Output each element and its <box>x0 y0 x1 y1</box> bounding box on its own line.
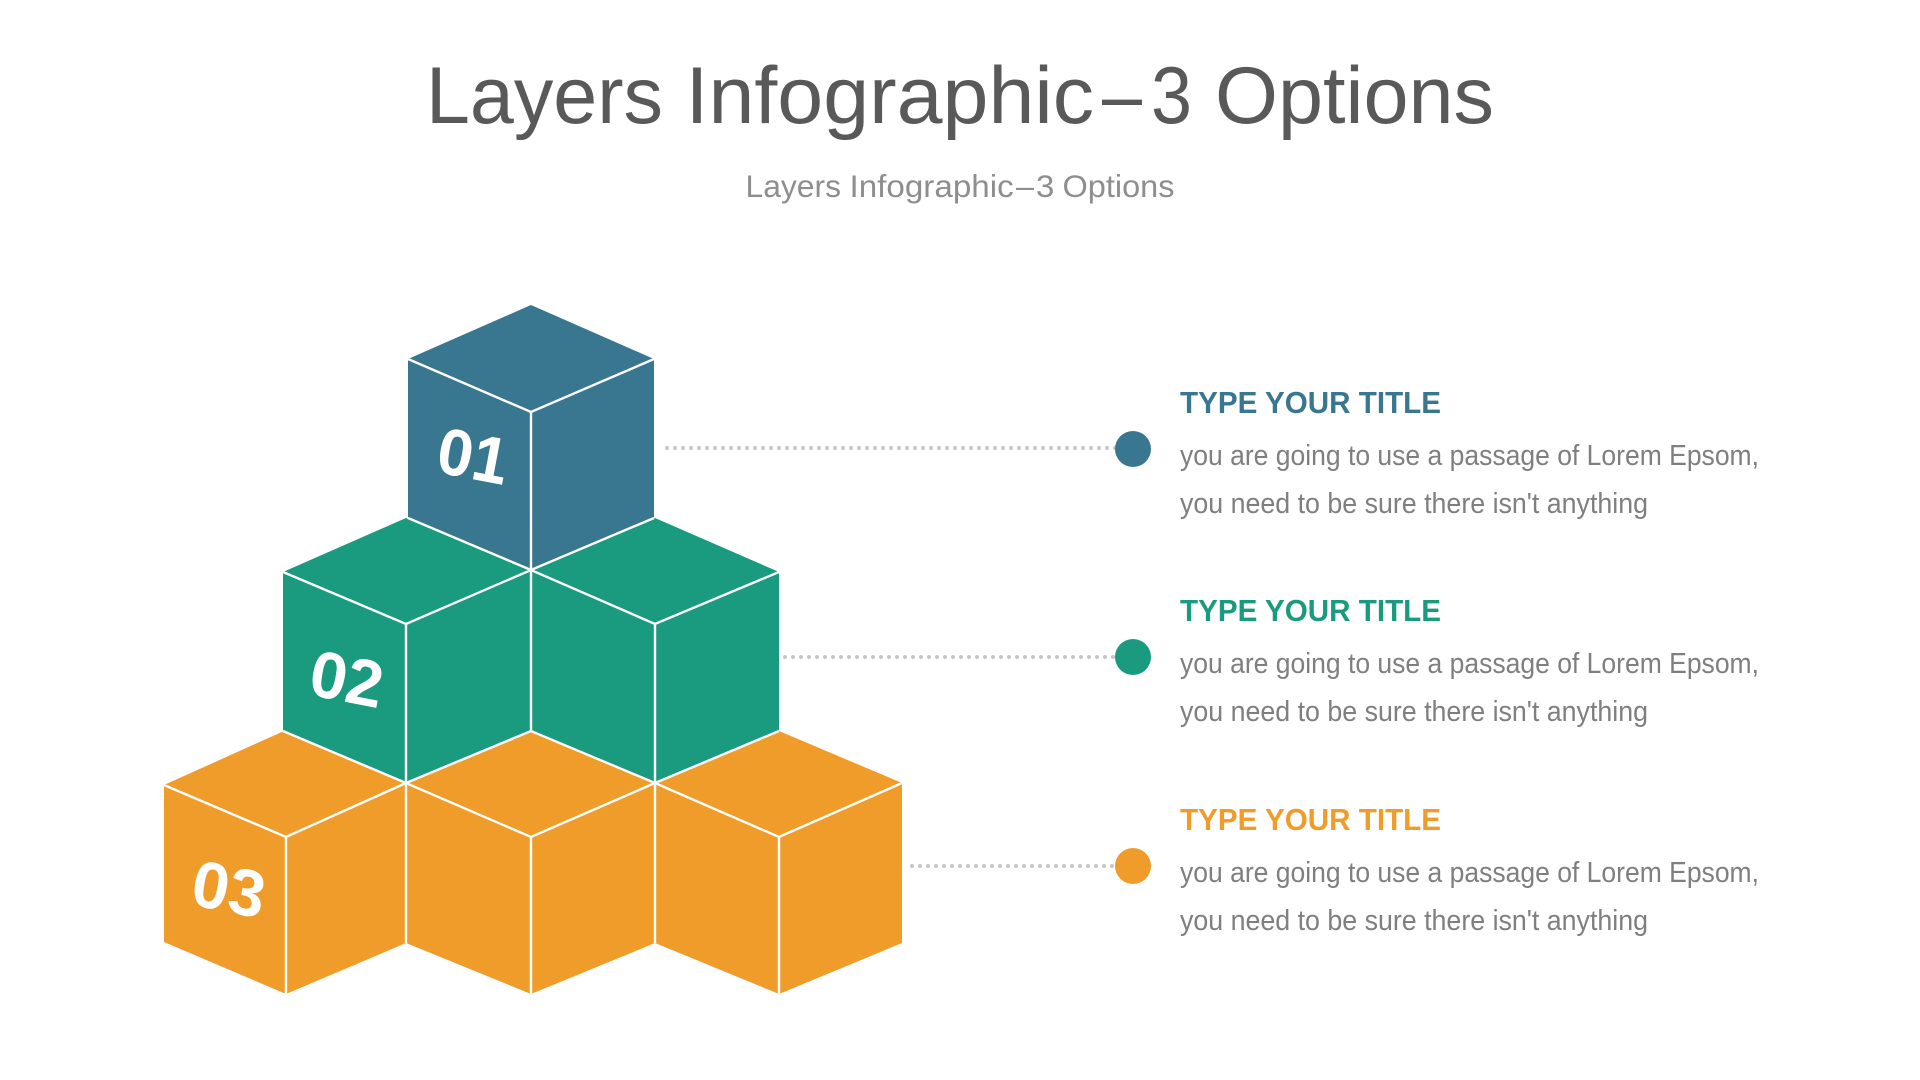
connector 1 <box>667 446 1116 450</box>
heading 3: TYPE YOUR TITLE <box>1180 803 1441 837</box>
connector 3 <box>912 864 1116 868</box>
orange cube left <box>164 731 406 994</box>
bottom layer: orange cubes <box>164 731 902 994</box>
text block 3 <box>1180 803 1759 937</box>
body line 1: you are going to use a passage of Lorem Epsom, <box>1180 440 1759 472</box>
body line 2: you need to be sure there isn't anything <box>1180 488 1648 520</box>
body line 2: you need to be sure there isn't anything <box>1180 905 1648 937</box>
title: Options <box>1215 51 1494 141</box>
green cube right <box>531 518 779 783</box>
top layer: blue cube <box>408 305 654 570</box>
connector 2 <box>785 655 1116 659</box>
heading 1: TYPE YOUR TITLE <box>1180 386 1441 420</box>
subtitle: Infographic <box>850 168 1014 204</box>
orange cube middle <box>406 731 655 994</box>
body line 1: you are going to use a passage of Lorem Epsom, <box>1180 857 1759 889</box>
subtitle: Layers <box>746 168 841 204</box>
orange cube right <box>655 731 902 994</box>
text block 1 <box>1180 386 1759 520</box>
subtitle: Options <box>1062 168 1174 204</box>
subtitle: – <box>1016 168 1034 204</box>
title: Layers <box>426 51 663 141</box>
title: 3 <box>1151 51 1192 141</box>
marker 1 <box>1115 431 1151 467</box>
body line 1: you are going to use a passage of Lorem Epsom, <box>1180 648 1759 680</box>
middle layer: green cubes <box>283 518 779 783</box>
number 02: 02 <box>310 636 382 724</box>
body line 2: you need to be sure there isn't anything <box>1180 696 1648 728</box>
subtitle: 3 <box>1036 168 1054 204</box>
cube pyramid <box>164 305 902 994</box>
title: Infographic <box>686 51 1094 141</box>
marker 3 <box>1115 848 1151 884</box>
green cube left <box>283 518 531 783</box>
number 01: 01 <box>437 412 507 500</box>
number 03: 03 <box>192 846 264 934</box>
marker 2 <box>1115 639 1151 675</box>
title: – <box>1102 51 1143 141</box>
text block 2 <box>1180 594 1759 728</box>
heading 2: TYPE YOUR TITLE <box>1180 594 1441 628</box>
